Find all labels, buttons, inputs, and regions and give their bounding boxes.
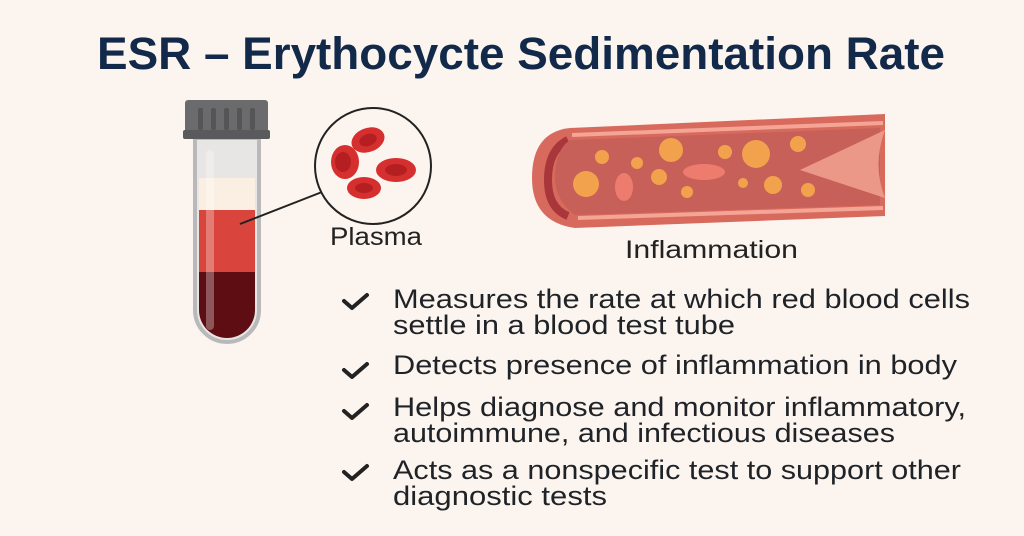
bullet 3: autoimmune, and infectious diseases: [393, 418, 895, 448]
bullet list: [344, 284, 970, 511]
callout: red blood cells magnifier: [240, 108, 431, 224]
bullet 4: Acts as a nonspecific test to support other: [393, 455, 961, 485]
bullet 3: [344, 392, 966, 448]
bullet 2: Detects presence of inflammation in body: [393, 350, 958, 380]
label: inflammation: Inflammation: [625, 236, 798, 264]
label: plasma: Plasma: [330, 223, 422, 251]
icon: test tube: [183, 100, 270, 342]
bullet 4: [344, 455, 961, 511]
bullet 3: Helps diagnose and monitor inflammatory,: [393, 392, 966, 422]
title: ESR – Erythocycte Sedimentation Rate: [97, 28, 945, 79]
icon: blood vessel: [532, 114, 885, 228]
bullet 1: [344, 284, 970, 340]
bullet 1: settle in a blood test tube: [393, 310, 735, 340]
bullet 1: Measures the rate at which red blood cells: [393, 284, 970, 314]
bullet 4: diagnostic tests: [393, 481, 607, 511]
